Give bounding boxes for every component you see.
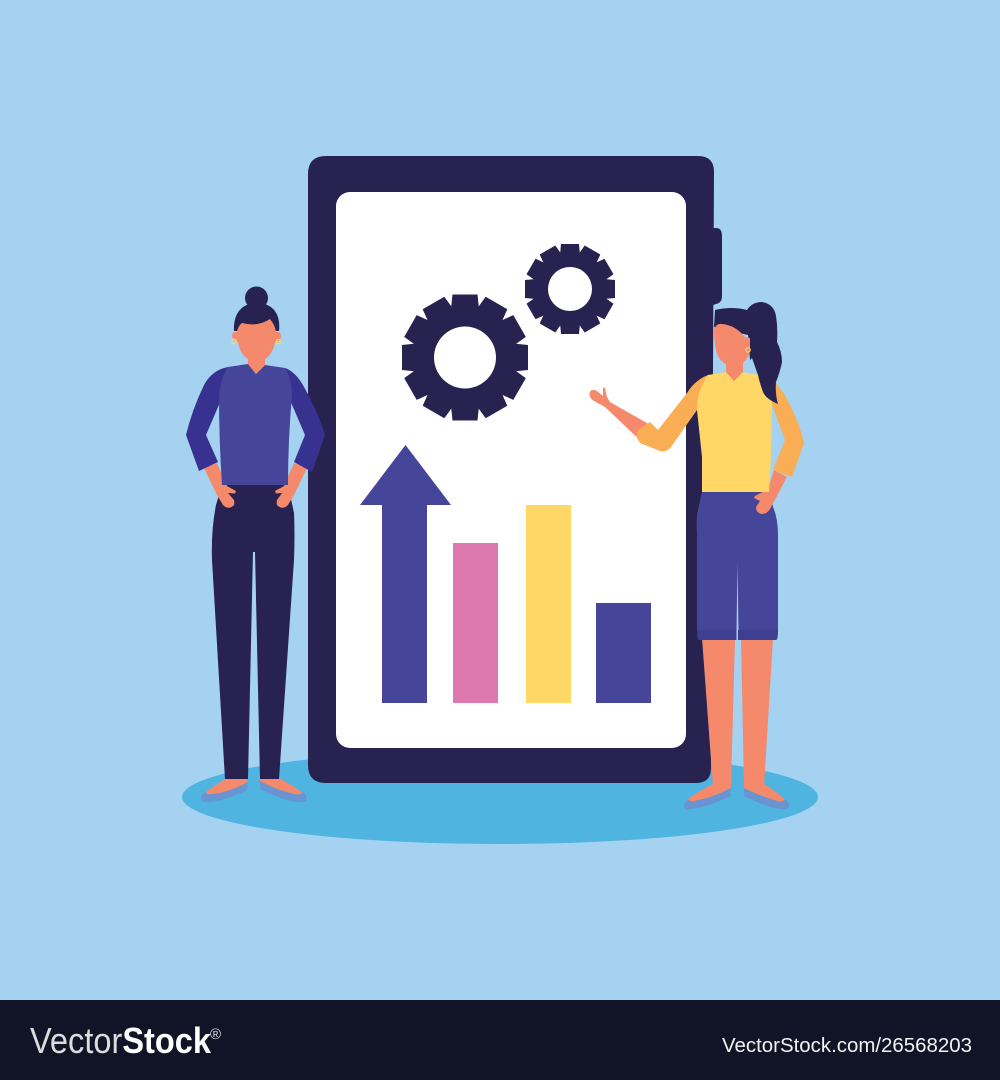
shorts <box>697 492 778 640</box>
growth arrow <box>360 445 451 703</box>
ground ellipse <box>182 750 818 844</box>
pink bar <box>453 543 498 703</box>
shirt <box>219 364 292 485</box>
registered mark: ® <box>210 1026 221 1043</box>
image id: VectorStock.com/26568203 <box>722 1035 972 1057</box>
bar chart with arrow <box>360 445 651 703</box>
shoes and feet <box>201 778 307 802</box>
shirt <box>697 372 773 492</box>
right sleeve <box>772 380 804 477</box>
pointing forearm and hand <box>589 387 652 442</box>
woman right <box>589 302 804 809</box>
right forearm and hand <box>754 470 787 514</box>
logo: VectorStock <box>30 1020 212 1061</box>
sleeves <box>186 367 325 472</box>
neck <box>726 360 743 381</box>
woman left <box>186 286 325 802</box>
large gear <box>402 294 528 420</box>
ponytail and hair <box>714 302 782 404</box>
pointing sleeve <box>637 375 708 452</box>
hair bun <box>245 286 268 310</box>
shorts cuffs <box>697 630 778 640</box>
earring <box>746 348 750 352</box>
earrings <box>232 339 281 344</box>
neck <box>248 355 265 374</box>
legs <box>702 638 735 787</box>
head <box>714 324 750 366</box>
left forearm and hand <box>204 463 236 508</box>
yellow bar <box>526 505 571 703</box>
blue bar <box>596 603 651 703</box>
smartphone <box>308 156 722 783</box>
shoes and feet <box>684 784 789 809</box>
right forearm and hand <box>275 463 307 508</box>
small gear <box>525 244 615 334</box>
pants <box>212 485 294 779</box>
head <box>232 319 281 362</box>
footer bar <box>0 1000 1000 1080</box>
hair <box>234 303 279 331</box>
